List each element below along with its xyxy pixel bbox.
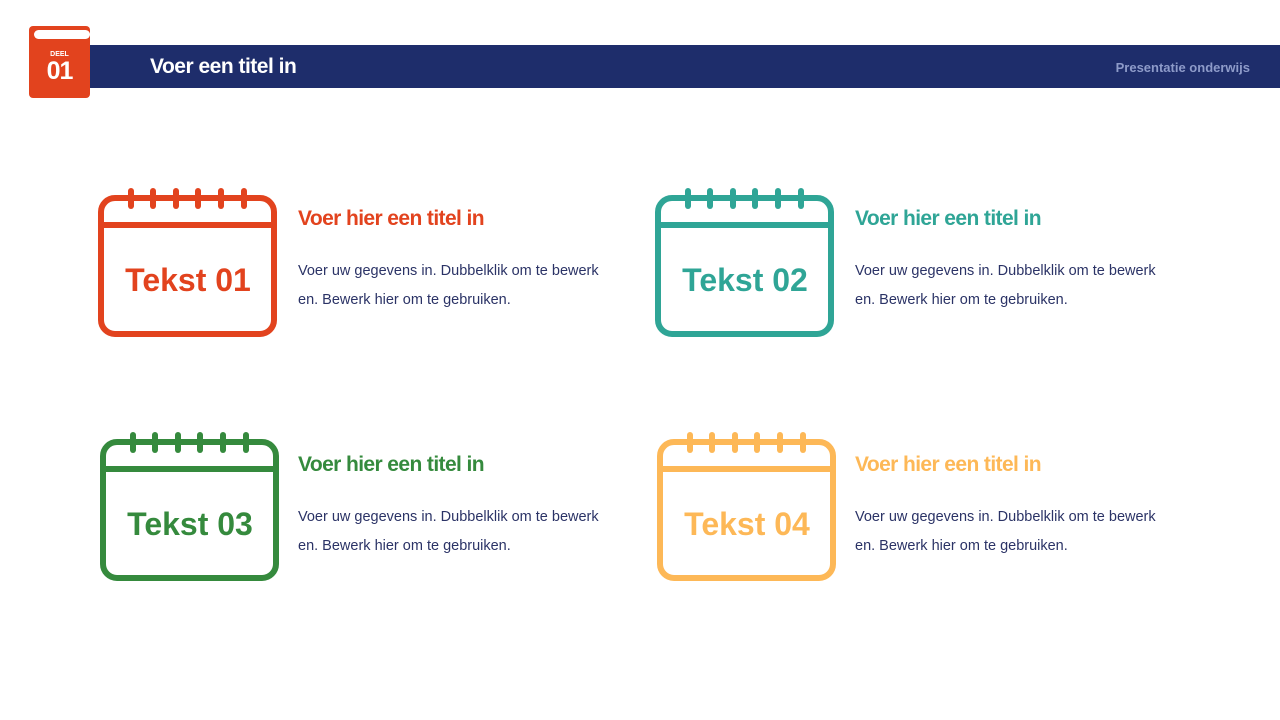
badge: book DEEL 01: 01 [47,57,72,85]
icon: calendar 3: Tekst 03 [127,506,253,542]
title 3: Voer hier een titel in [298,453,484,476]
text 3: Voer uw gegevens in. Dubbelklik om te bewerk en. Bewerk hier om te gebruiken. [298,509,599,554]
badge: book DEEL 01 [29,26,90,98]
icon: calendar 4 [657,432,836,581]
title 4: Voer hier een titel in [855,453,1041,476]
icon: calendar 3 [100,432,279,581]
icon: calendar 2 [655,188,834,337]
item 1 [98,188,599,337]
icon: calendar 2: Tekst 02 [682,262,808,298]
header title: Voer een titel in [150,55,296,78]
text 1: Voer uw gegevens in. Dubbelklik om te bewerk en. Bewerk hier om te gebruiken. [298,263,599,308]
header subtitle: Presentatie onderwijs [1116,60,1250,75]
text 2: Voer uw gegevens in. Dubbelklik om te bewerk en. Bewerk hier om te gebruiken. [855,263,1156,308]
icon: calendar 1: Tekst 01 [125,262,251,298]
item 3 [100,432,599,581]
badge: book DEEL 01: DEEL [50,51,69,58]
title 1: Voer hier een titel in [298,207,484,230]
title 2: Voer hier een titel in [855,207,1041,230]
header bar [88,45,1280,88]
item 2 [655,188,1156,337]
icon: calendar 1 [98,188,277,337]
icon: calendar 4: Tekst 04 [684,506,810,542]
text 4: Voer uw gegevens in. Dubbelklik om te bewerk en. Bewerk hier om te gebruiken. [855,509,1156,554]
item 4 [657,432,1156,581]
